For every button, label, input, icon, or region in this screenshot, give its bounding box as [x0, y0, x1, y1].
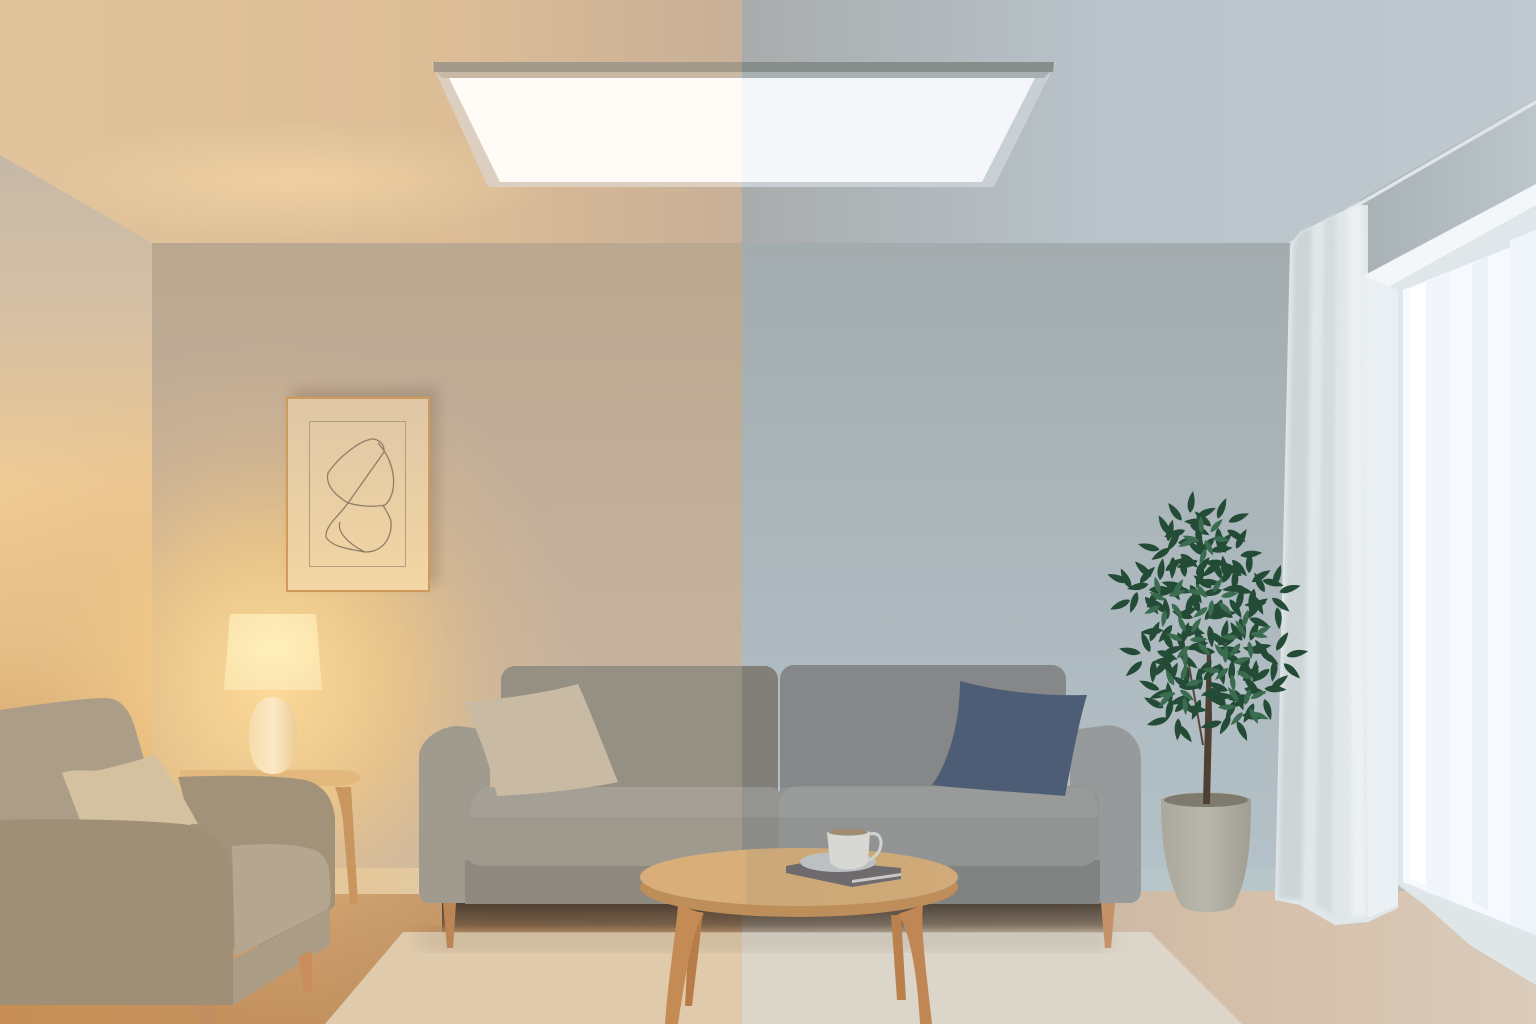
left side wall — [0, 155, 152, 760]
window light — [1403, 237, 1536, 935]
left curtain folds — [1278, 226, 1312, 900]
sofa seat cushion right — [779, 786, 1099, 866]
ceiling light panel — [431, 62, 1056, 187]
rug shadow — [420, 932, 1110, 946]
sofa back cushion left — [501, 666, 778, 806]
sofa base — [465, 860, 742, 904]
curtains and window — [1275, 184, 1536, 985]
curtain rail — [1288, 100, 1536, 243]
sofa seat top highlight — [470, 787, 1098, 817]
table lamp — [224, 614, 322, 774]
side table — [180, 770, 360, 905]
chair seat cushion — [232, 844, 331, 957]
sofa left leg — [443, 903, 456, 948]
art line drawing — [326, 439, 394, 552]
floor — [0, 891, 1536, 1024]
sofa — [419, 665, 1141, 948]
sofa right arm — [1070, 725, 1141, 903]
baseboard — [335, 868, 1280, 894]
window panes and sheer folds — [1410, 282, 1426, 885]
table top — [640, 848, 958, 906]
armchair — [0, 698, 335, 1024]
plant trunk — [1203, 650, 1212, 804]
window rail — [1363, 184, 1536, 302]
sofa under shadow — [442, 903, 1112, 933]
rug — [325, 932, 1242, 1024]
framed art — [286, 388, 438, 592]
table front legs — [665, 905, 704, 1024]
sofa left pillow — [463, 684, 618, 796]
chair front arm — [0, 819, 233, 1005]
potted plant — [1106, 486, 1313, 912]
chair back — [0, 698, 150, 825]
table rim — [640, 857, 958, 917]
saucer — [800, 852, 876, 872]
curtain backing — [1275, 187, 1536, 985]
plant pot — [1161, 792, 1251, 912]
chair pillow — [62, 755, 198, 824]
book stack — [786, 860, 901, 887]
plant foliage lighter leaves — [1141, 505, 1278, 727]
chair right arm — [178, 776, 335, 950]
curtain hem — [1398, 885, 1536, 985]
cup — [827, 829, 870, 870]
ceiling — [0, 0, 1536, 244]
lamp shade — [224, 614, 322, 690]
chair legs — [298, 950, 312, 992]
coffee table — [640, 848, 958, 1024]
lamp base — [249, 697, 297, 774]
sofa left arm — [419, 726, 490, 903]
table back legs — [685, 912, 703, 1006]
sofa right pillow — [932, 681, 1087, 796]
back wall: cool half — [742, 243, 1290, 903]
chair side base — [233, 908, 330, 1005]
sofa back cushion right — [780, 665, 1066, 805]
plant foliage dark leaves — [1106, 486, 1313, 752]
upper right wall band — [1360, 98, 1536, 280]
sofa right leg — [1101, 903, 1115, 948]
book and cup — [786, 828, 901, 887]
back wall: warm half — [152, 243, 742, 903]
lamp glow on wall — [92, 416, 508, 956]
sofa seat cushion left — [465, 787, 742, 866]
